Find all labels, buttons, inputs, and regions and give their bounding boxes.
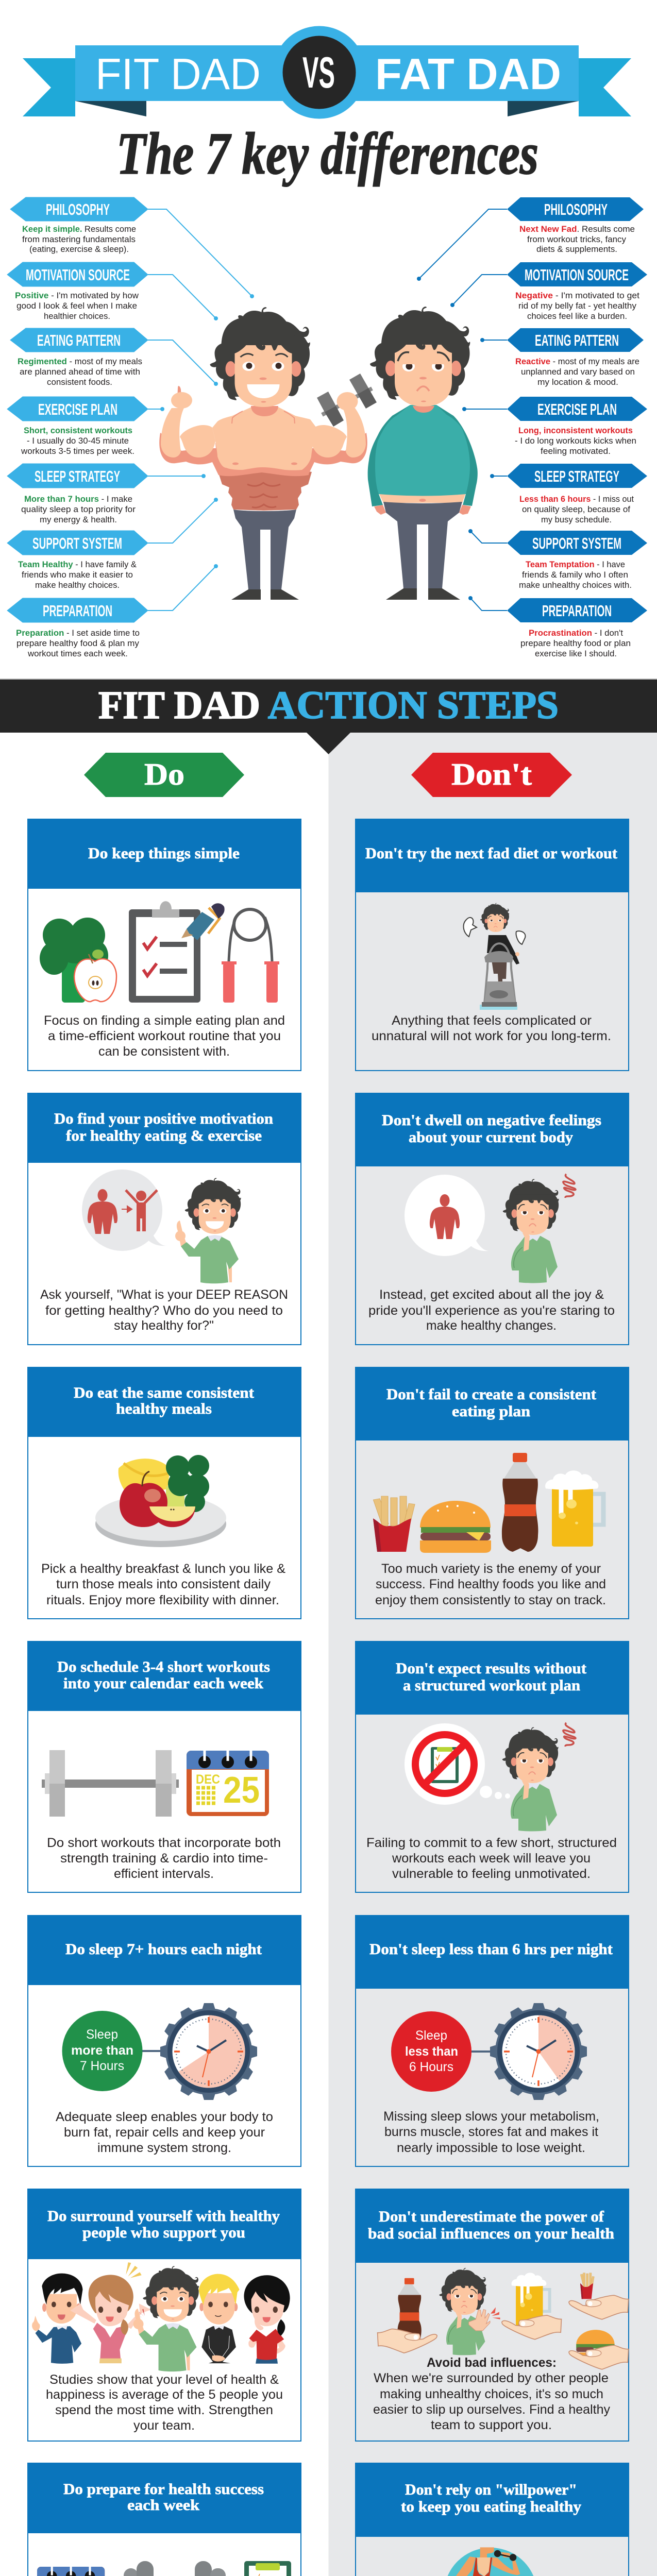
card text: Missing sleep slows your metabolism, <box>383 2109 599 2124</box>
text: support system: Team Healthy - I have family & <box>18 560 137 569</box>
card: do find positive motivation <box>27 1093 301 1345</box>
icon: dumbbell <box>317 374 377 427</box>
card heading: Do prepare for health success <box>63 2481 264 2498</box>
card heading <box>63 2481 264 2514</box>
card: do schedule workouts <box>27 1641 301 1892</box>
text: motivation source: good I look & feel when I make <box>16 301 137 311</box>
card text: nearly impossible to lose weight. <box>397 2141 585 2155</box>
label: support system: SUPPORT SYSTEM <box>32 534 122 552</box>
banner text: vs: VS <box>302 48 335 97</box>
text: exercise plan <box>21 426 134 456</box>
figure: fit dad <box>159 307 377 600</box>
card heading: Do schedule 3-4 short workouts <box>57 1658 270 1675</box>
card text: vulnerable to feeling unmotivated. <box>392 1867 591 1881</box>
card text: turn those meals into consistent daily <box>56 1577 271 1591</box>
label: sleep strategy <box>7 464 148 488</box>
card: do keep things simple <box>27 819 301 1071</box>
label: support system <box>7 531 148 555</box>
card: do surround yourself <box>27 2189 301 2441</box>
card heading: Don't dwell on negative feelings <box>382 1112 601 1129</box>
card heading: Don't underestimate the power of <box>379 2208 604 2225</box>
panel: fit dad list <box>7 197 148 658</box>
card heading <box>47 2208 280 2241</box>
card text: Studies show that your level of health & <box>49 2372 279 2387</box>
icon: barbell <box>42 1750 179 1817</box>
text: philosophy: Keep it simple. Results come <box>22 224 136 234</box>
card heading <box>396 1660 586 1694</box>
card text <box>41 1562 285 1607</box>
text: motivation source <box>15 291 139 321</box>
card: don't sleep less <box>355 1915 629 2166</box>
text: exercise plan: - I usually do 30-45 minute <box>27 436 129 446</box>
card: don't dwell <box>355 1093 629 1345</box>
card text: immune system strong. <box>97 2141 231 2155</box>
text: philosophy: diets & supplements. <box>536 244 617 254</box>
icon: clock gear <box>160 2003 257 2100</box>
text: eating pattern: unplanned and vary based on <box>521 367 635 377</box>
card heading: to keep you eating healthy <box>401 2498 581 2515</box>
panel: action steps header <box>0 680 657 754</box>
label: preparation: PREPARATION <box>43 602 112 620</box>
card heading <box>57 1658 270 1692</box>
text: support system: friends who make it easier to <box>22 570 133 580</box>
label: exercise plan: EXERCISE PLAN <box>38 400 117 418</box>
card heading: into your calendar each week <box>63 1675 263 1692</box>
card heading: bad social influences on your health <box>368 2225 614 2242</box>
label: preparation <box>7 598 148 622</box>
card text <box>375 1562 606 1607</box>
text: motivation source: choices feel like a burden. <box>527 311 627 321</box>
badge: sleep more than 7 hours: more than <box>71 2043 133 2058</box>
icon: beer in hand <box>502 2273 562 2340</box>
card text: stay healthy for?" <box>114 1318 214 1333</box>
card heading <box>54 1110 273 1144</box>
character: worried man <box>502 1727 559 1831</box>
label: philosophy: PHILOSOPHY <box>46 200 110 218</box>
card text: your team. <box>133 2418 195 2433</box>
card text <box>368 1287 615 1333</box>
person: woman in red <box>244 2275 290 2364</box>
card text: team to support you. <box>431 2418 552 2432</box>
text: exercise plan: Short, consistent workouts <box>24 426 132 435</box>
card heading: eating plan <box>452 1403 530 1420</box>
badge: do <box>84 753 244 797</box>
card heading: Don't rely on "willpower" <box>405 2481 577 2498</box>
text: motivation source: healthier choices. <box>44 311 110 321</box>
card heading <box>386 1386 596 1420</box>
icon: jump rope <box>222 909 279 1003</box>
bold callout: avoid bad influences: Avoid bad influences: <box>427 2355 557 2370</box>
text: philosophy: (eating, exercise & sleep). <box>29 244 129 254</box>
card text <box>372 1013 611 1043</box>
icon: soda in hand <box>378 2278 437 2353</box>
text: philosophy <box>22 224 136 254</box>
card text <box>373 2371 610 2432</box>
label: sleep strategy <box>507 464 647 488</box>
badge: don't <box>411 753 572 797</box>
card heading <box>401 2481 581 2515</box>
card text: make healthy changes. <box>426 1318 557 1333</box>
text: sleep strategy: on quality sleep, because of <box>522 504 630 514</box>
text: eating pattern: consistent foods. <box>47 377 112 387</box>
thought bubble: no plan <box>405 1723 510 1805</box>
card text: pride you'll experience as you're staring to <box>368 1303 615 1318</box>
text: philosophy: Next New Fad. Results come <box>519 224 635 234</box>
icon: fries <box>373 1496 415 1552</box>
card: do prepare <box>27 2463 301 2576</box>
text: motivation source: Negative - I'm motivated to get <box>515 291 639 300</box>
card heading: Do sleep 7+ hours each night <box>65 1941 262 1958</box>
text: philosophy: from mastering fundamentals <box>22 234 136 244</box>
label: exercise plan <box>507 397 647 421</box>
card text: Failing to commit to a few short, structured <box>366 1836 617 1850</box>
badge: sleep less than 6 hours: less than <box>405 2044 458 2059</box>
card text: Focus on finding a simple eating plan and <box>44 1013 285 1028</box>
text: support system: make unhealthy choices with. <box>519 580 632 590</box>
panel: do / don't backgrounds <box>0 733 657 2576</box>
text: exercise plan <box>515 426 636 456</box>
card text: Pick a healthy breakfast & lunch you like & <box>41 1562 285 1576</box>
text: eating pattern: Regimented - most of my meals <box>18 357 142 366</box>
card heading: Do surround yourself with healthy <box>47 2208 280 2225</box>
badge: do: Do <box>144 757 184 791</box>
label: philosophy <box>507 197 644 221</box>
person: curly man <box>133 2266 199 2371</box>
text: preparation: workout times each week. <box>27 649 128 658</box>
badge: sleep more than 7 hours <box>62 2011 163 2091</box>
text: preparation <box>16 628 140 658</box>
card heading: Don't fail to create a consistent <box>386 1386 596 1403</box>
text: support system: friends & family who I often <box>522 570 628 580</box>
heading: fit dad action steps: FIT DAD ACTION STEPS <box>98 684 559 727</box>
card text <box>40 1287 288 1333</box>
text: eating pattern: my location & mood. <box>537 377 618 387</box>
card text: Anything that feels complicated or <box>392 1013 592 1028</box>
text: philosophy <box>519 224 635 254</box>
text: sleep strategy: More than 7 hours - I make <box>24 494 132 504</box>
label: eating pattern <box>10 328 148 352</box>
section divider line <box>0 679 657 680</box>
icon: clock gear <box>490 2003 587 2100</box>
text: preparation: Procrastination - I don't <box>529 628 623 638</box>
card text: Ask yourself, "What is your DEEP REASON <box>40 1287 288 1302</box>
icon: soda bottle <box>502 1453 538 1552</box>
card: don't try next fad <box>355 819 629 1071</box>
speech bubble: fat to fit <box>82 1170 166 1251</box>
badge: sleep more than 7 hours: Sleep <box>86 2027 118 2042</box>
label: eating pattern <box>507 328 644 352</box>
character: worried man <box>503 1179 559 1283</box>
card: do sleep 7+ <box>27 1915 301 2166</box>
text: sleep strategy <box>21 494 136 524</box>
card text: for getting healthy? Who do you need to <box>45 1303 283 1318</box>
card text <box>47 1836 281 1881</box>
text: motivation source <box>515 291 639 321</box>
illustration: weak man with dumbbell <box>444 2547 537 2576</box>
character: happy man pointing <box>175 1178 241 1283</box>
thought bubble: body <box>405 1175 489 1256</box>
icon: calendar: 25 <box>223 1770 260 1811</box>
card heading: for healthy eating & exercise <box>66 1127 262 1144</box>
icon: calendar: DEC <box>196 1772 220 1787</box>
card text: unnatural will not work for you long-term. <box>372 1029 611 1043</box>
text: preparation: prepare healthy food & plan my <box>16 638 139 648</box>
card text: When we're surrounded by other people <box>374 2371 609 2385</box>
card text: success. Find healthy foods you like and <box>376 1577 606 1591</box>
icon: calendar <box>187 1751 269 1816</box>
card text: spend the most time with. Strengthen <box>55 2403 273 2417</box>
badge: sleep less than 6 hours <box>391 2011 492 2092</box>
icon: broccoli and apple <box>40 918 116 1003</box>
card text: workouts each week will leave you <box>392 1851 591 1866</box>
text: eating pattern: are planned ahead of time with <box>20 367 140 377</box>
label: philosophy: PHILOSOPHY <box>544 200 608 218</box>
card text: rituals. Enjoy more flexibility with dinner. <box>46 1593 279 1607</box>
text: preparation <box>520 628 631 658</box>
card heading: healthy meals <box>116 1400 212 1417</box>
text: preparation: prepare healthy food or plan <box>520 638 631 648</box>
card heading: each week <box>127 2497 199 2514</box>
card text: burn fat, repair cells and keep your <box>64 2125 265 2140</box>
card: don't fail eating plan <box>355 1367 629 1619</box>
text: support system <box>519 560 632 590</box>
label: preparation: PREPARATION <box>542 602 612 620</box>
card heading: Do eat the same consistent <box>74 1384 254 1401</box>
card text: can be consistent with. <box>98 1044 230 1059</box>
text: motivation source: rid of my belly fat - yet healthy <box>518 301 636 311</box>
card text: efficient intervals. <box>114 1867 214 1881</box>
card text: Do short workouts that incorporate both <box>47 1836 281 1850</box>
text: exercise plan: feeling motivated. <box>541 446 611 456</box>
label: preparation <box>507 598 647 622</box>
figure: fat dad <box>368 307 478 600</box>
person: woman in pink <box>70 2262 151 2363</box>
badge: don't: Don't <box>451 757 532 791</box>
text: support system: make healthy choices. <box>35 580 120 590</box>
character: man refusing <box>439 2268 500 2355</box>
badge: sleep less than 6 hours: Sleep <box>415 2028 447 2043</box>
icon: clipboard checklist <box>129 901 225 1003</box>
label: support system <box>507 531 647 555</box>
illustration: man on treadmill <box>464 903 525 1010</box>
card: don't rely on willpower <box>355 2463 629 2576</box>
title banner <box>23 26 631 118</box>
badge: sleep more than 7 hours: 7 Hours <box>80 2059 124 2073</box>
card text: easier to slip up ourselves. Find a healthy <box>373 2402 610 2417</box>
label: exercise plan <box>7 397 148 421</box>
icon: beer mug <box>545 1470 603 1547</box>
card text <box>366 1836 617 1881</box>
banner text: fat dad: FAT DAD <box>375 50 561 99</box>
card text: enjoy them consistently to stay on track. <box>375 1593 606 1607</box>
text: exercise plan: - I do long workouts kicks when <box>515 436 636 446</box>
card text <box>383 2109 599 2155</box>
icon: calendar <box>37 2567 105 2576</box>
text: sleep strategy: quality sleep a top priority for <box>21 504 136 514</box>
text: preparation: Preparation - I set aside time to <box>16 628 140 638</box>
illustration: group of people <box>32 2262 290 2371</box>
icon: checklist clipboard <box>244 2561 291 2576</box>
text: eating pattern <box>515 357 639 387</box>
card heading <box>74 1384 254 1417</box>
card text: making unhealthy choices, it's so much <box>380 2387 603 2401</box>
label: motivation source <box>507 262 647 286</box>
card text: burns muscle, stores fat and makes it <box>384 2125 598 2139</box>
text: preparation: exercise like I should. <box>535 649 617 658</box>
card text <box>46 2372 283 2433</box>
text: eating pattern: Reactive - most of my meals are <box>515 357 639 366</box>
card: don't expect results <box>355 1641 629 1892</box>
card text <box>44 1013 285 1059</box>
text: sleep strategy: Less than 6 hours - I miss out <box>519 494 634 504</box>
card text: Instead, get excited about all the joy & <box>379 1287 604 1302</box>
heading: the 7 key differences: The 7 key differences <box>116 121 538 187</box>
label: philosophy <box>10 197 148 221</box>
card heading: Do keep things simple <box>88 845 240 862</box>
label: eating pattern: EATING PATTERN <box>37 331 121 349</box>
label: sleep strategy: SLEEP STRATEGY <box>35 467 120 485</box>
label: motivation source: MOTIVATION SOURCE <box>26 266 130 284</box>
card text: happiness is average of the 5 people you <box>46 2387 283 2402</box>
text: support system: Team Temptation - I have <box>526 560 625 569</box>
card heading <box>368 2208 614 2242</box>
text: sleep strategy <box>519 494 634 524</box>
text: exercise plan: workouts 3-5 times per week. <box>21 446 134 456</box>
icon: dumbbell <box>114 2561 234 2576</box>
card text: Too much variety is the enemy of your <box>381 1562 601 1576</box>
card: don't underestimate <box>355 2189 629 2441</box>
card heading: Don't try the next fad diet or workout <box>365 845 617 862</box>
banner text: fit dad: FIT DAD <box>95 50 261 99</box>
card heading: Do find your positive motivation <box>54 1110 273 1127</box>
person: blond man <box>199 2274 240 2363</box>
illustration: bad influences <box>378 2268 629 2369</box>
icon: red scribble <box>563 1723 576 1747</box>
text: philosophy: from workout tricks, fancy <box>527 234 626 244</box>
person: man in blue <box>32 2274 82 2364</box>
card text <box>56 2110 273 2155</box>
panel: fat dad list <box>507 197 647 658</box>
card: do eat the same <box>27 1367 301 1619</box>
leader lines: fat dad <box>417 209 507 611</box>
card text: strength training & cardio into time- <box>60 1851 268 1866</box>
text: motivation source: Positive - I'm motivated by how <box>15 291 139 300</box>
card heading <box>382 1112 601 1146</box>
icon: burger in hand <box>569 2330 629 2369</box>
text: eating pattern <box>18 357 142 387</box>
icon: burger <box>420 1501 491 1553</box>
card text: Adequate sleep enables your body to <box>56 2110 273 2124</box>
illustration: fruit plate <box>95 1455 226 1547</box>
card heading: Don't sleep less than 6 hrs per night <box>369 1941 613 1958</box>
card heading: about your current body <box>409 1129 573 1146</box>
card heading: people who support you <box>82 2224 245 2241</box>
text: exercise plan: Long, inconsistent workouts <box>518 426 633 435</box>
card heading: a structured workout plan <box>403 1677 580 1694</box>
icon: red scribble <box>563 1174 576 1198</box>
text: sleep strategy: my energy & health. <box>40 515 117 524</box>
text: sleep strategy: my busy schedule. <box>541 515 612 524</box>
label: motivation source <box>7 262 148 286</box>
badge: sleep less than 6 hours: 6 Hours <box>409 2060 453 2074</box>
text: support system <box>18 560 137 590</box>
card text: a time-efficient workout routine that you <box>48 1029 281 1043</box>
icon: fries in hand <box>569 2273 629 2319</box>
card heading: Don't expect results without <box>396 1660 586 1677</box>
leader lines: fit dad <box>148 209 254 611</box>
